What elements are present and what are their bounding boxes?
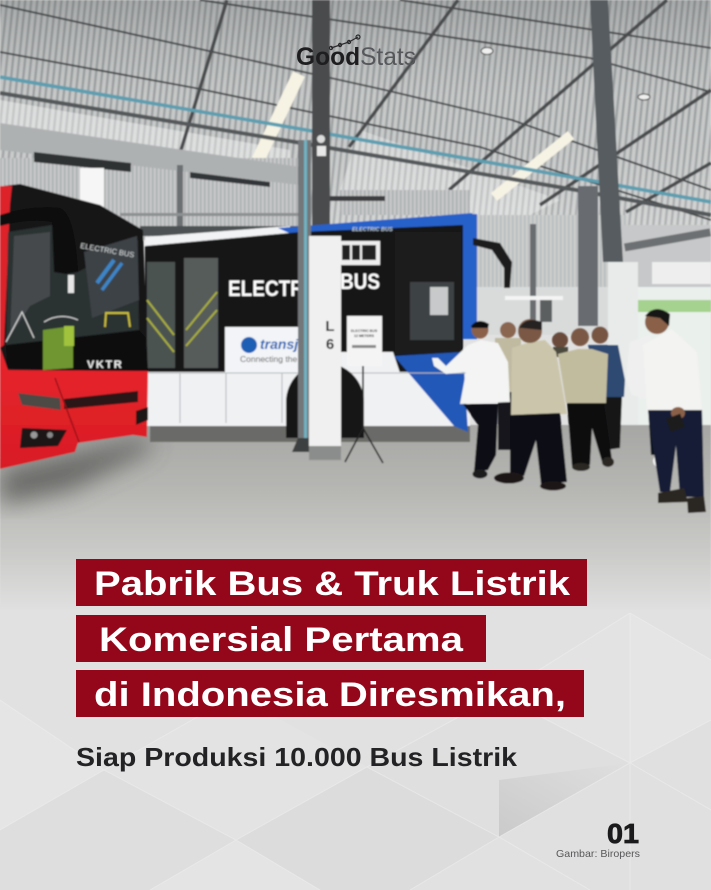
official in white shirt, right foreground [643, 309, 706, 513]
thin column and white pillar: L [325, 318, 335, 335]
official in white shirt, gesturing [432, 321, 510, 478]
bus cab [0, 184, 148, 372]
title line 2 [76, 615, 486, 662]
pipes [0, 77, 711, 215]
skylights [258, 74, 571, 197]
windshield glass with reflections [6, 225, 139, 345]
title line 1: Pabrik Bus & Truk Listrik [94, 565, 570, 603]
photo: factory interior with electric buses and officials [0, 0, 711, 610]
thin column and white pillar: 6 [326, 336, 334, 353]
VKTR wordmark: VKTR [87, 359, 123, 371]
transjakarta panel [225, 327, 315, 373]
sign on tripod: 12 METERS [354, 334, 375, 338]
transjakarta panel: Connecting the L [240, 354, 305, 364]
title line 2: Komersial Pertama [99, 621, 464, 659]
sign on tripod: ELECTRIC BUS [351, 329, 378, 333]
page number: 01 [607, 818, 639, 849]
right exhibit wall with green band [608, 262, 711, 430]
title line 3: di Indonesia Diresmikan, [94, 676, 566, 714]
ceiling lamps [481, 48, 650, 100]
subtitle: Siap Produksi 10.000 Bus Listrik [76, 742, 518, 772]
wheel [286, 363, 364, 438]
logo wordmark: GoodStats [296, 43, 416, 71]
red VKTR bus [0, 184, 148, 469]
transjakarta panel: transjak [260, 336, 315, 352]
title line 3 [76, 670, 584, 717]
image credit: Gambar: Biropers [556, 848, 640, 860]
lower background with low-poly facets [0, 600, 711, 890]
columns [312, 0, 623, 326]
official behind the main group [552, 332, 568, 357]
electric bus: white and blue: ELECTRIC BUS [352, 227, 393, 233]
red front panel [0, 347, 148, 469]
bus lettering: ELECTR [228, 276, 304, 301]
official in white behind [626, 335, 665, 467]
official in khaki, back left [495, 322, 521, 450]
red VKTR bus: ELECTRIC BUS [80, 241, 135, 259]
sign on tripod [345, 316, 383, 463]
factory back wall [0, 123, 711, 335]
electric bus: white and blue [145, 213, 512, 438]
title block [76, 559, 587, 717]
official in batik shirt [588, 326, 625, 450]
bus shadows [0, 436, 150, 505]
electric bus: white and blue: BUS [340, 269, 380, 294]
official in khaki, right [558, 328, 614, 471]
ceiling [0, 0, 711, 240]
thin column and white pillar [292, 140, 341, 460]
floor [0, 425, 711, 610]
GoodStats logo [296, 35, 416, 71]
side mirror [0, 207, 78, 274]
main official in khaki [494, 319, 567, 490]
officials walking [432, 309, 706, 513]
title line 1 [76, 559, 587, 606]
logo chart mark [329, 35, 360, 50]
